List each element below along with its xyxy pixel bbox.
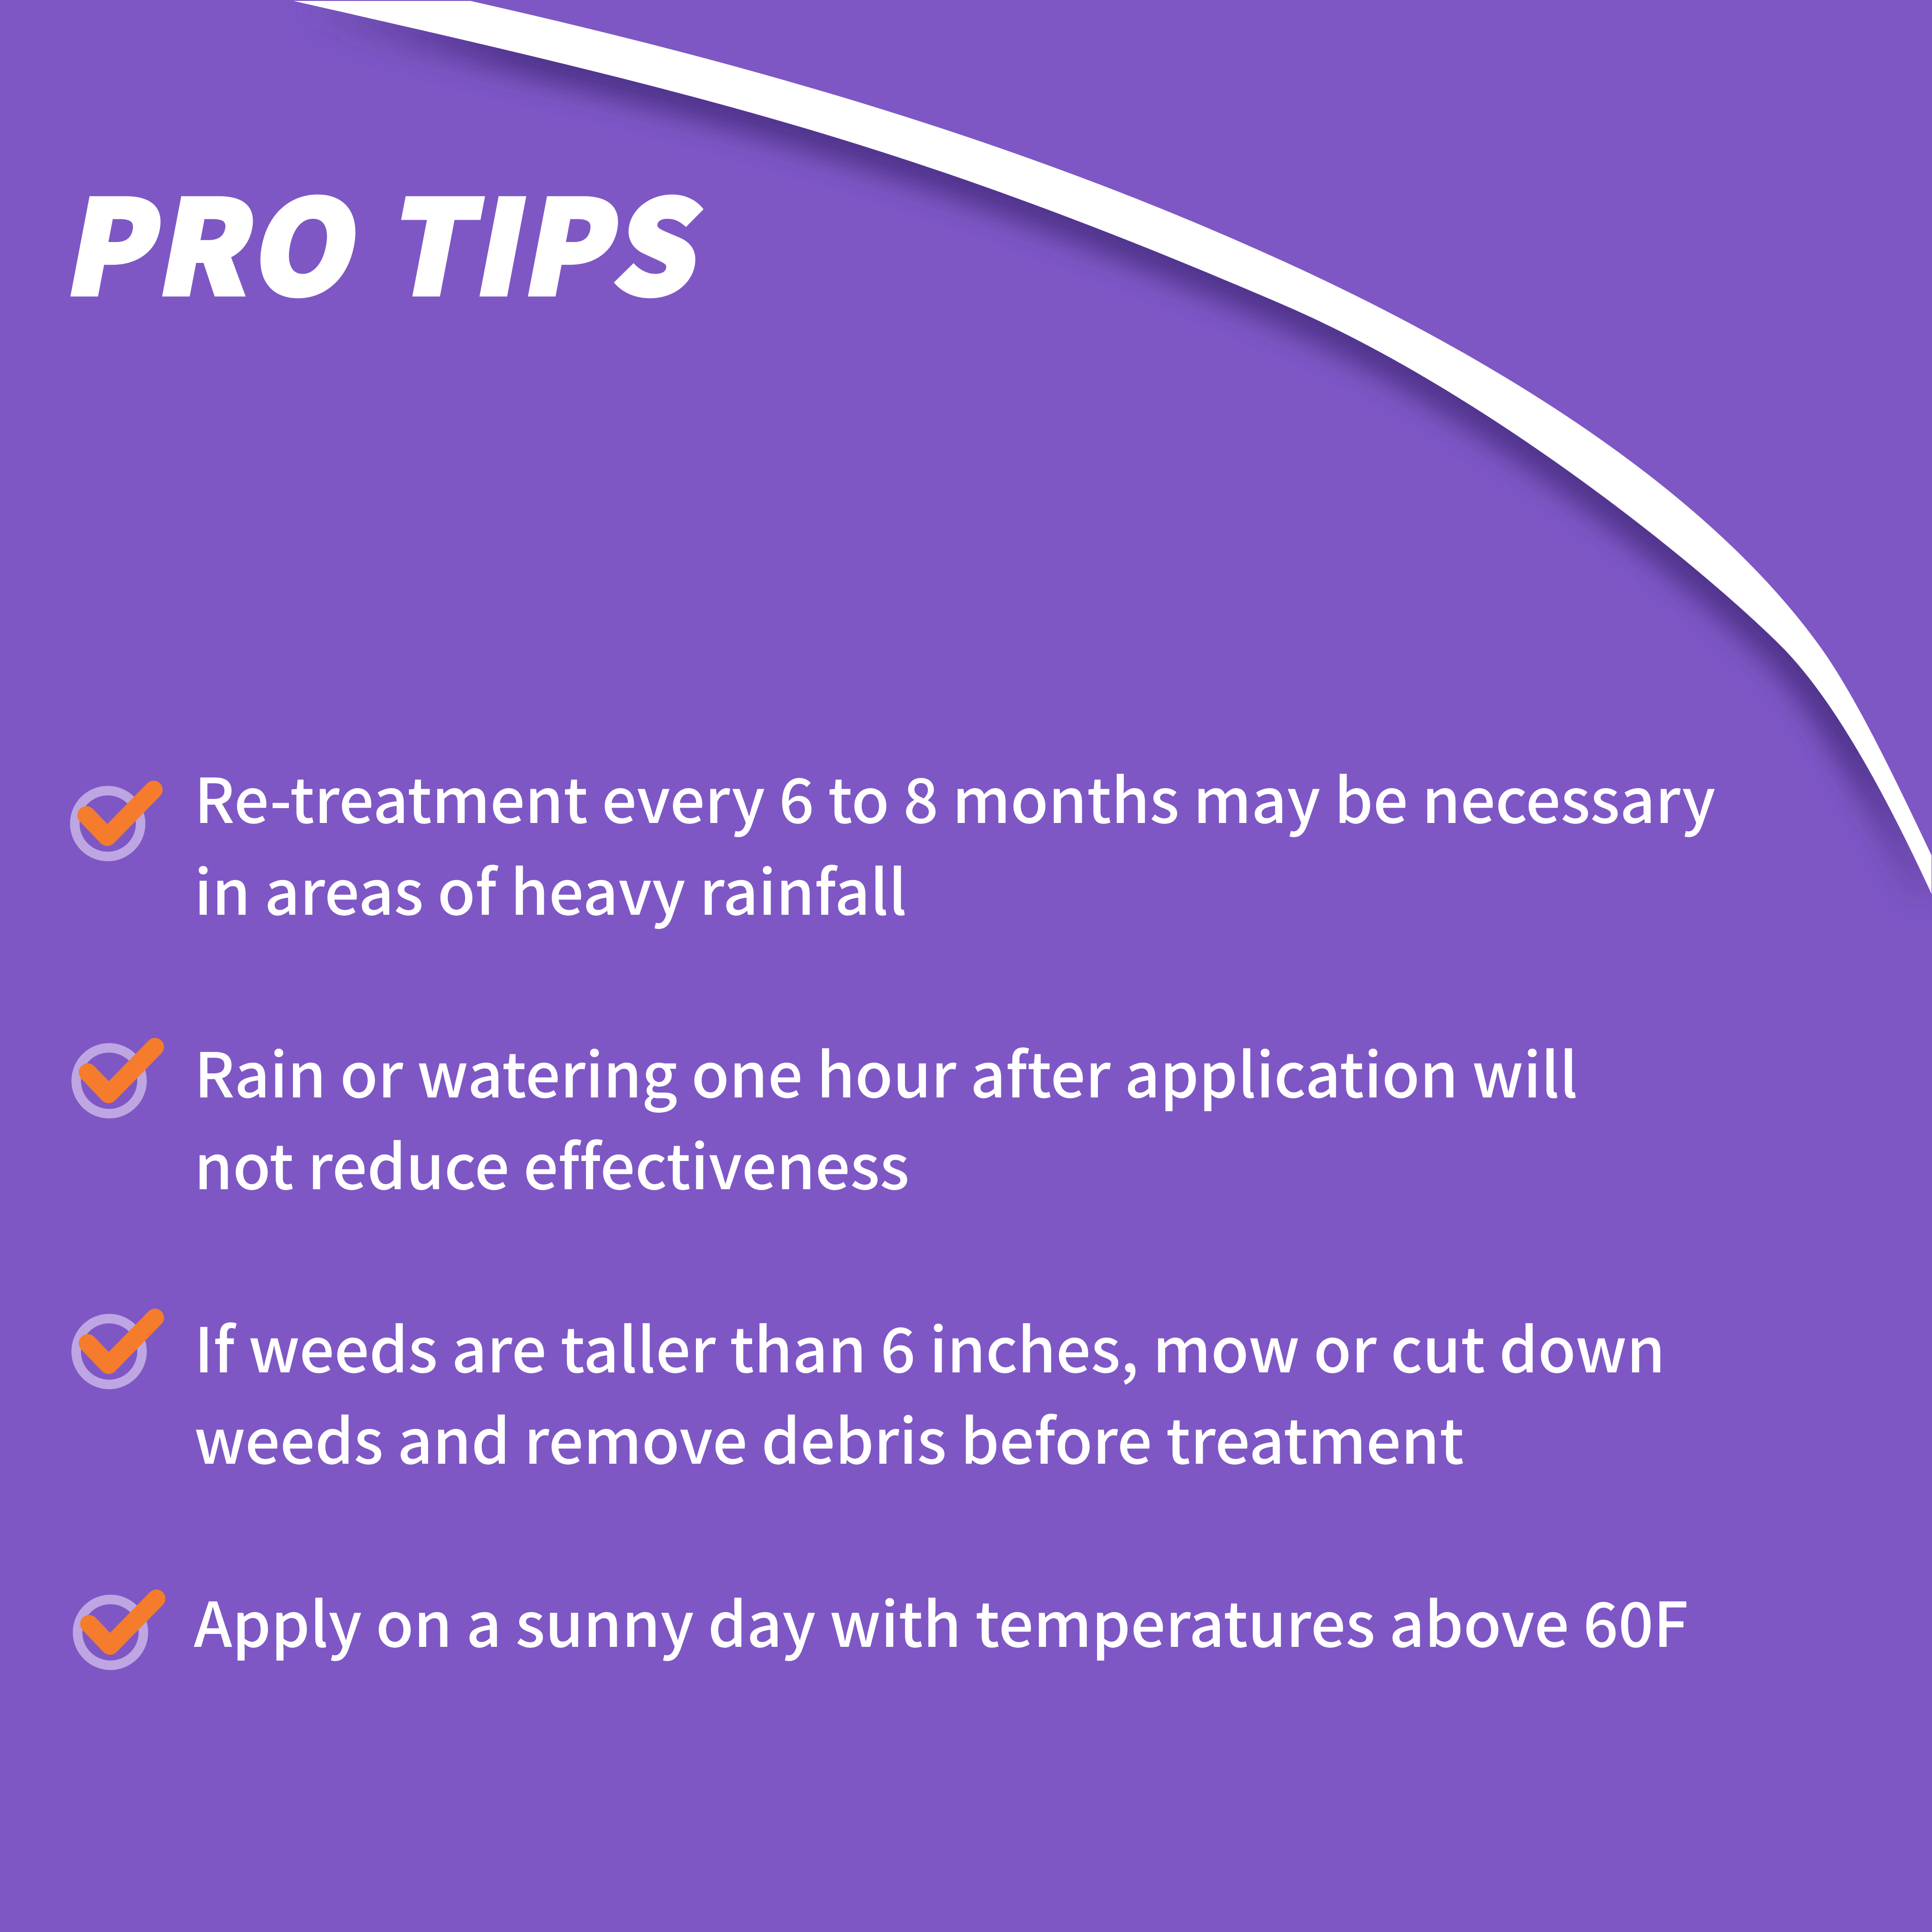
tip 4: [77, 1576, 1689, 1665]
tip text 3: weeds and remove debris before treatment: [194, 1393, 1464, 1482]
tip 1: [75, 752, 1715, 933]
tip 2: [76, 1027, 1578, 1207]
title: PRO TIPS: [55, 146, 724, 332]
icon: check mark in circle: [77, 1599, 156, 1665]
curl shadow: [293, 1, 1932, 894]
tip text 2: Rain or watering one hour after application will: [194, 1027, 1578, 1116]
icon: check mark in circle: [76, 1318, 155, 1384]
tip text 3: If weeds are taller than 6 inches, mow or cut down: [194, 1301, 1665, 1390]
tip 3: [76, 1301, 1665, 1482]
tip text 1: Re-treatment every 6 to 8 months may be necessary: [194, 752, 1715, 841]
tip text 4: Apply on a sunny day with temperatures above 60F: [194, 1576, 1689, 1665]
tip text 2: not reduce effectiveness: [194, 1118, 909, 1207]
icon: check mark in circle: [75, 790, 153, 856]
page curl: white curved band with shadow: [293, 1, 1932, 894]
white curved band: [293, 1, 1932, 894]
icon: check mark in circle: [76, 1047, 155, 1114]
tip text 1: in areas of heavy rainfall: [194, 844, 907, 933]
